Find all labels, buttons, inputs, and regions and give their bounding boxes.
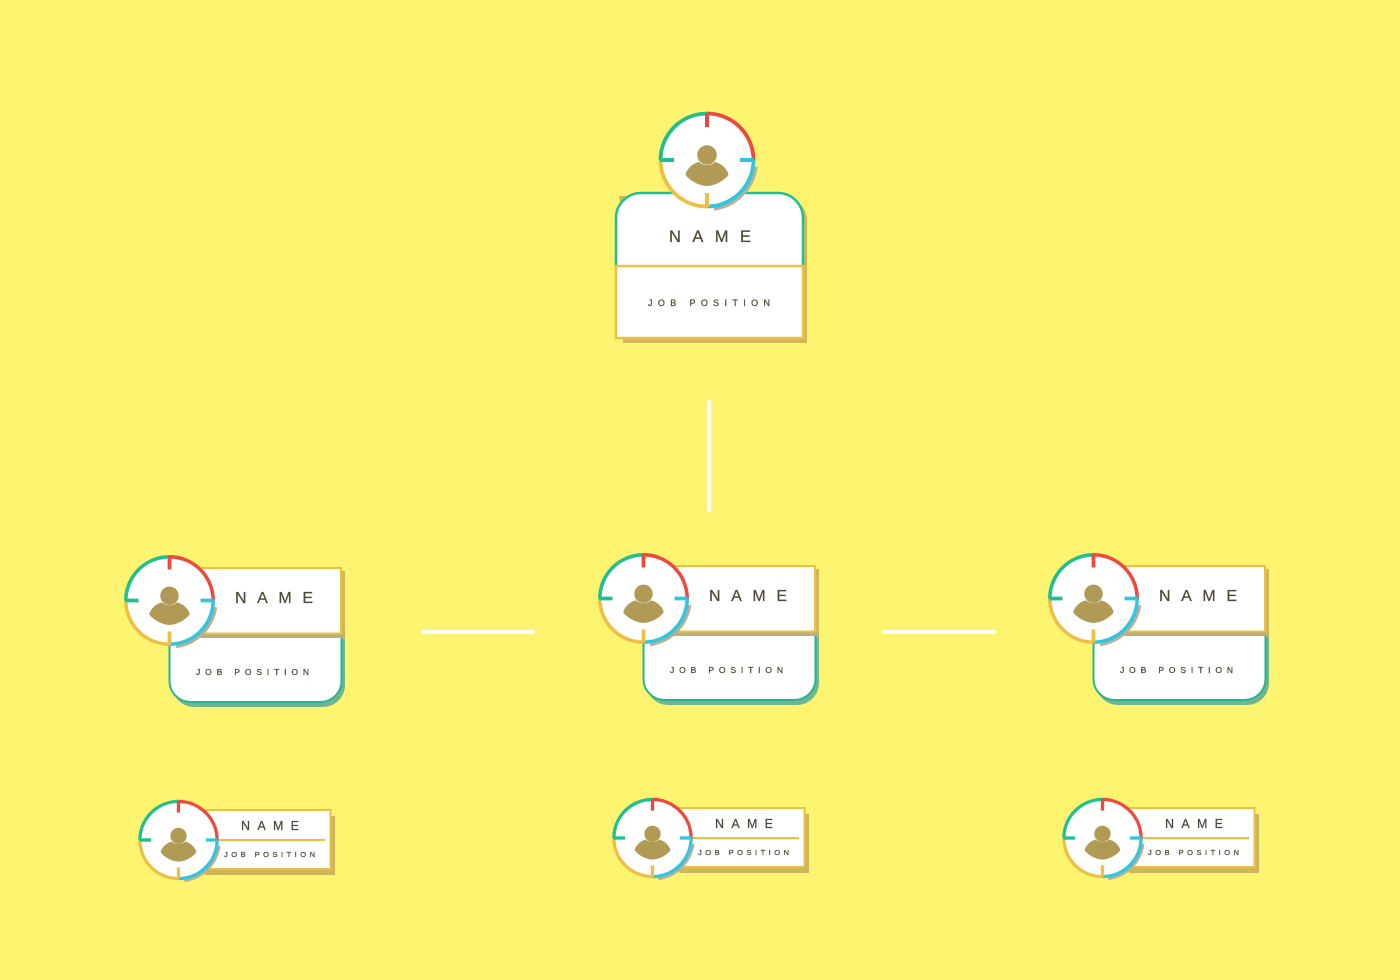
- heading: name: NAME: [715, 817, 773, 831]
- icon: avatar: [599, 554, 690, 645]
- heading: name: NAME: [709, 588, 787, 605]
- text: job position: JOB POSITION: [196, 667, 309, 677]
- text: job position: JOB POSITION: [224, 850, 315, 859]
- heading: name: NAME: [235, 590, 313, 607]
- heading: name: NAME: [1159, 588, 1237, 605]
- text: job position: JOB POSITION: [648, 298, 770, 308]
- panel: small card centre: [613, 799, 809, 879]
- heading: name: NAME: [241, 819, 299, 833]
- text: job position: JOB POSITION: [1148, 848, 1239, 857]
- text: job position: JOB POSITION: [1120, 665, 1233, 675]
- icon: avatar: [139, 801, 219, 881]
- heading: name: NAME: [1165, 817, 1223, 831]
- icon: avatar: [660, 113, 756, 209]
- panel: middle card centre: [599, 554, 819, 705]
- panel: top card: [616, 113, 807, 343]
- panel: small card left: [139, 801, 335, 881]
- connector: centre to right: [882, 630, 996, 634]
- connector: left to centre: [421, 630, 535, 634]
- icon: avatar: [1063, 799, 1143, 879]
- heading: name: NAME: [669, 228, 751, 246]
- icon: avatar: [613, 799, 693, 879]
- panel: middle card left: [125, 556, 345, 707]
- icon: avatar: [125, 556, 216, 647]
- text: job position: JOB POSITION: [670, 665, 783, 675]
- panel: middle card right: [1049, 554, 1269, 705]
- connector: top to middle: [707, 400, 711, 512]
- text: job position: JOB POSITION: [698, 848, 789, 857]
- icon: avatar: [1049, 554, 1140, 645]
- panel: small card right: [1063, 799, 1259, 879]
